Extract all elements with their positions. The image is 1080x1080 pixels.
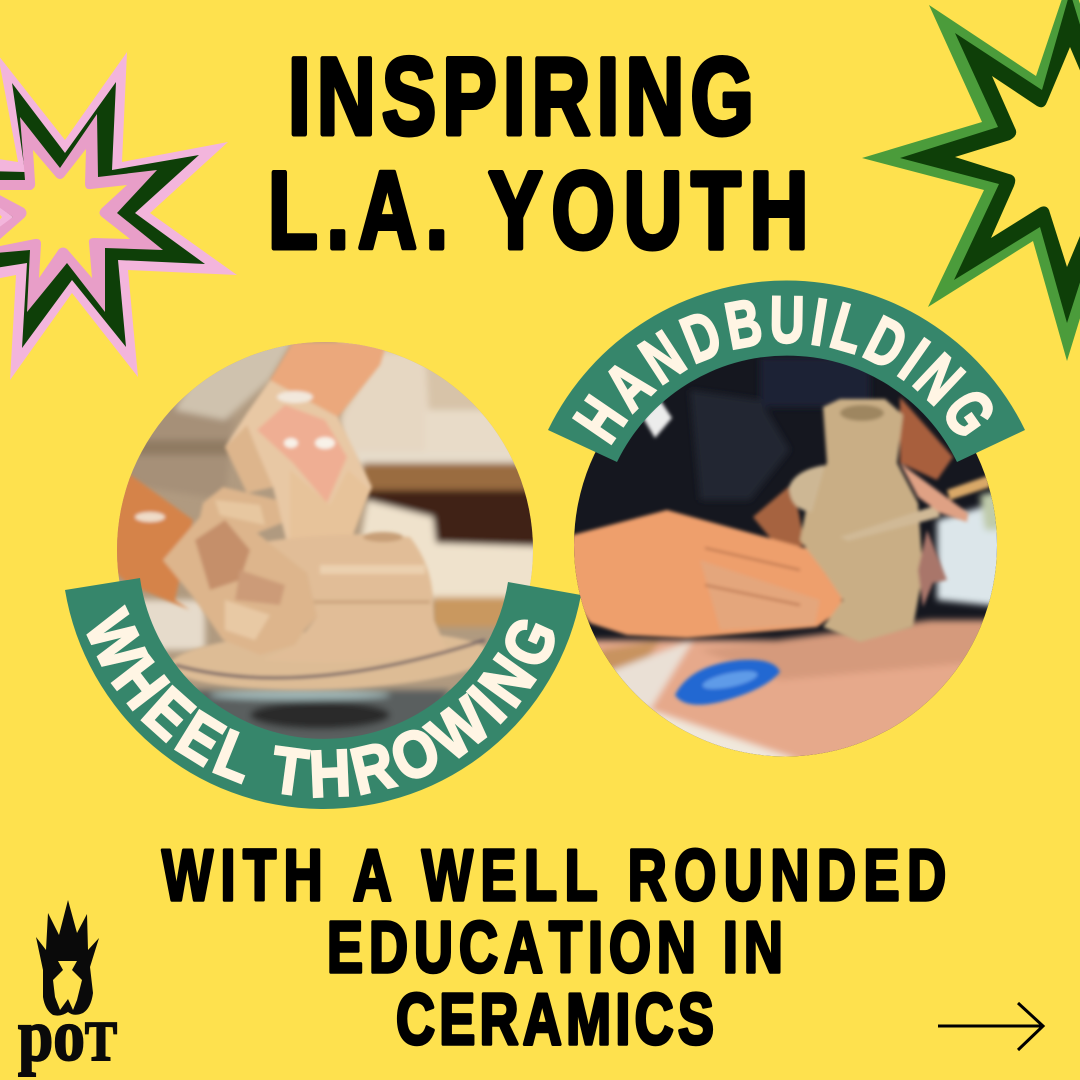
photo: wheel throwing [117,342,533,739]
left hand [163,487,317,655]
clay vessel [800,399,923,642]
closing statement [162,836,954,1060]
title [268,34,817,272]
logo wordmark: poT [18,995,117,1077]
starburst: green, top right [862,0,1080,361]
logo: POT [18,900,117,1077]
statement line 2: EDUCATION IN [327,908,789,988]
left hand [565,510,843,638]
statement line 3: CERAMICS [396,980,718,1060]
upper arm [270,342,387,417]
blue tool [675,660,780,705]
title line 2: L.A. YOUTH [268,148,817,272]
arrow [938,1003,1043,1050]
title line 1: INSPIRING [288,34,760,158]
left forearm [117,474,194,610]
statement line 1: WITH A WELL ROUNDED [162,836,954,916]
photo: handbuilding [574,356,997,756]
ribbon: wheel throwing: WHEEL THROWING [86,604,555,798]
logo vase cut-out [53,961,82,1010]
starburst: pink and dark green, left [0,52,237,380]
wheel disc [172,632,485,692]
upper hand [225,380,372,543]
ribbon: handbuilding: HANDBUILDING [572,296,993,446]
clay pot [268,532,441,637]
logo flame mark [36,900,99,1016]
